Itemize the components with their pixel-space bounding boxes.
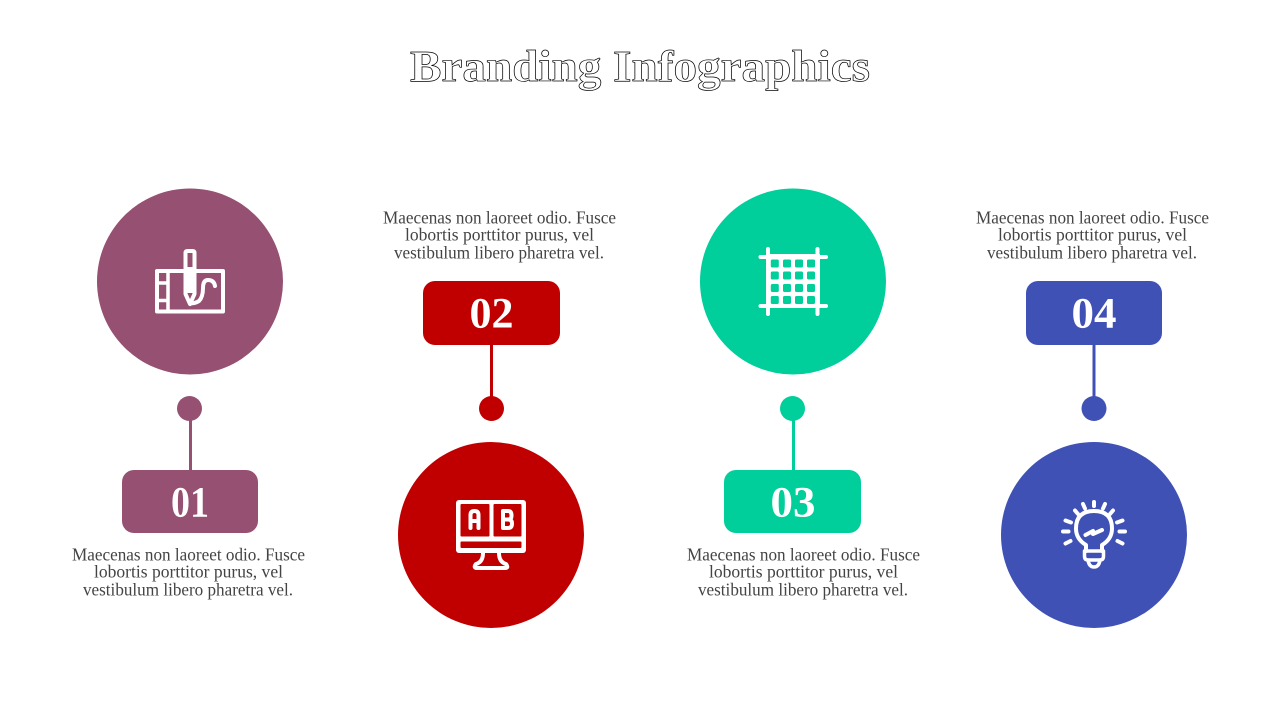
marker dot (780, 396, 805, 421)
number badge: 01 (171, 480, 209, 526)
number badge (423, 281, 560, 345)
marker dot (1082, 396, 1106, 421)
connector line (189, 420, 192, 472)
description text: lobortis porttitor purus, vel (998, 224, 1187, 244)
description text (72, 544, 305, 600)
circle: step 03 icon background (700, 188, 886, 374)
description text: Maecenas non laoreet odio. Fusce (72, 544, 305, 564)
circle: step 01 icon background (97, 188, 283, 374)
panel: step 02 (383, 208, 616, 628)
description text: Maecenas non laoreet odio. Fusce (383, 208, 616, 228)
description text: vestibulum libero pharetra vel. (394, 242, 604, 262)
title: Branding Infographics (410, 42, 870, 91)
number badge: 04 (1072, 290, 1116, 338)
marker dot (479, 396, 504, 421)
icon: drawing tablet and pen (157, 251, 223, 312)
description text (383, 208, 616, 262)
panel: step 01 (72, 188, 305, 600)
number badge (724, 470, 861, 533)
connector line (1092, 344, 1096, 398)
description text: Maecenas non laoreet odio. Fusce (976, 208, 1209, 228)
number badge: 02 (470, 290, 514, 338)
number badge (1026, 281, 1162, 345)
description text: vestibulum libero pharetra vel. (698, 580, 908, 600)
circle: step 02 icon background (398, 442, 584, 628)
description text: lobortis porttitor purus, vel (709, 562, 898, 582)
description text: vestibulum libero pharetra vel. (987, 242, 1197, 262)
description text (976, 208, 1209, 262)
panel: step 03 (687, 188, 920, 600)
icon: light bulb (1063, 502, 1125, 567)
connector line (490, 344, 493, 398)
description text: lobortis porttitor purus, vel (405, 224, 594, 244)
description text: lobortis porttitor purus, vel (94, 562, 283, 582)
connector line (792, 420, 795, 472)
description text (687, 544, 920, 600)
panel: step 04 (976, 208, 1209, 628)
marker dot (177, 396, 202, 421)
number badge: 03 (770, 480, 816, 526)
icon: grid with crop marks (760, 249, 826, 314)
description text: Maecenas non laoreet odio. Fusce (687, 544, 920, 564)
description text: vestibulum libero pharetra vel. (83, 580, 293, 600)
icon: monitor with A B (456, 500, 526, 568)
number badge (122, 470, 258, 533)
circle: step 04 icon background (1001, 442, 1187, 628)
